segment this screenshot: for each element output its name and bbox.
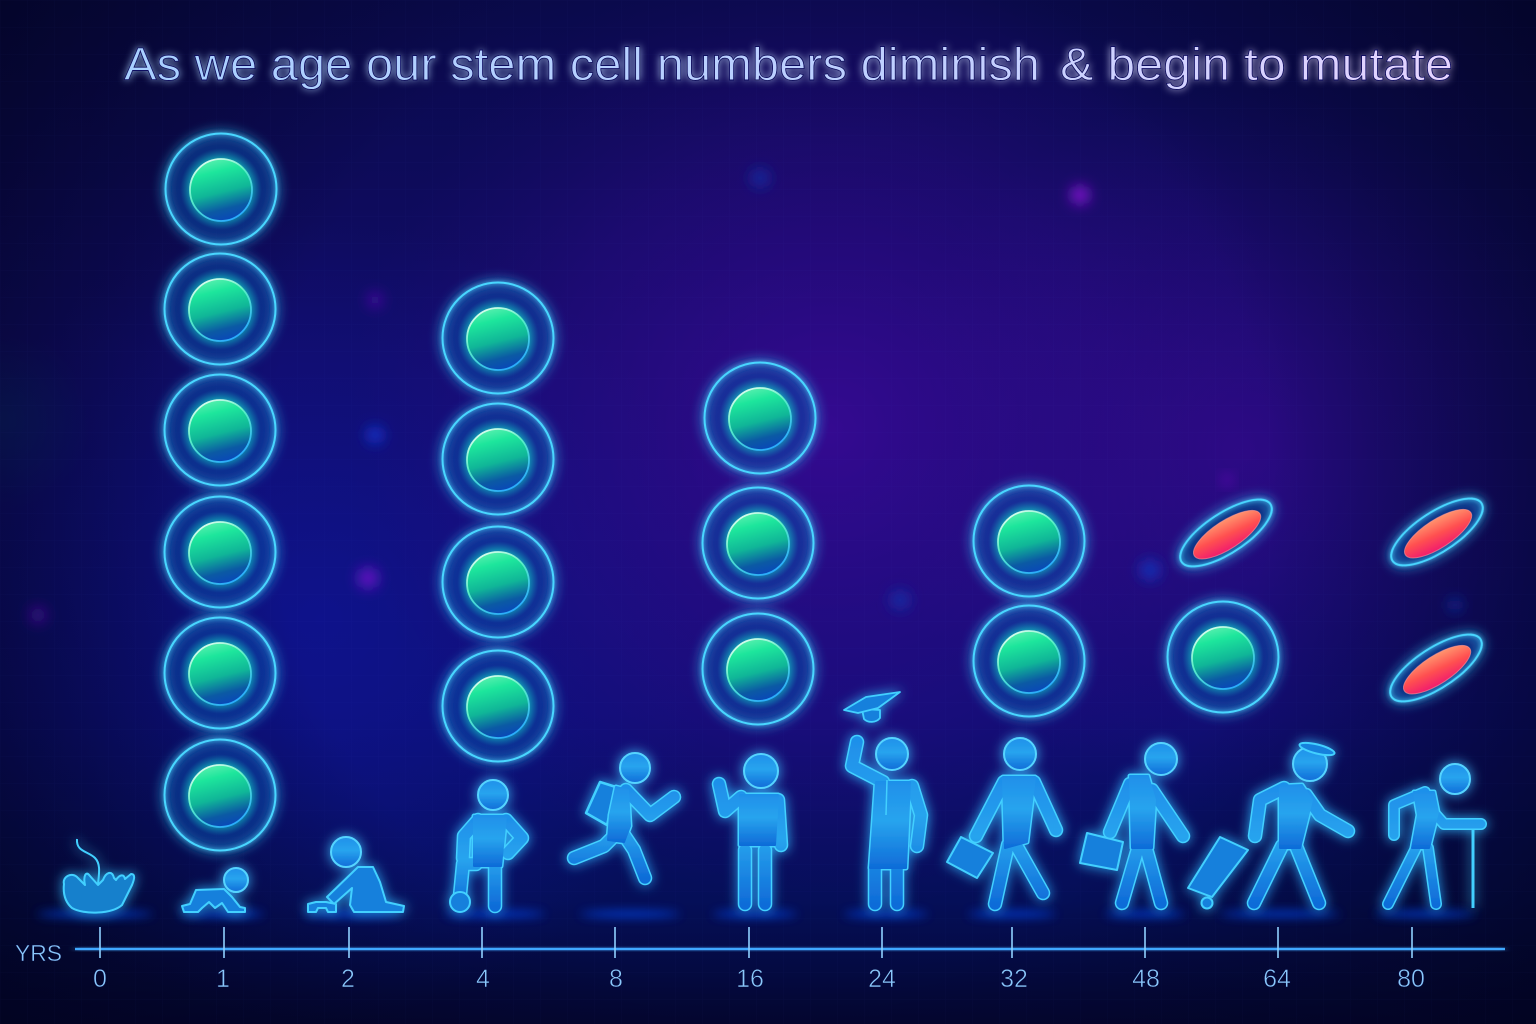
pilot cap bbox=[1298, 740, 1336, 758]
stem cell bbox=[974, 486, 1084, 596]
stem cell bbox=[1168, 602, 1278, 712]
toy bbox=[308, 902, 336, 912]
stem cell column: age 64 bbox=[1168, 487, 1281, 712]
age axis bbox=[15, 927, 1505, 993]
suitcase wheel bbox=[1202, 898, 1212, 908]
stem cell column: age 32 bbox=[974, 486, 1084, 716]
stem cell bbox=[164, 496, 276, 608]
title: & begin to mutate bbox=[1060, 38, 1453, 90]
figure: running child with backpack, age 8 bbox=[574, 753, 674, 878]
age labels: 24 bbox=[868, 965, 896, 993]
mutated cell bbox=[1382, 486, 1492, 578]
figure: crawling baby, age 1 bbox=[182, 868, 248, 912]
figure: child with ball, age 4 bbox=[450, 780, 522, 912]
age labels bbox=[93, 965, 1425, 993]
stem cell bbox=[164, 254, 276, 364]
stem cell bbox=[702, 488, 814, 598]
age labels: 80 bbox=[1397, 965, 1425, 993]
briefcase bbox=[1080, 833, 1123, 870]
stem cell bbox=[164, 740, 276, 850]
cane bbox=[1472, 826, 1474, 908]
age labels: 32 bbox=[1000, 965, 1028, 993]
figure: older adult with suitcase, age 64 bbox=[1188, 740, 1348, 908]
stem cell column: age 1 bbox=[164, 134, 276, 850]
age labels: 4 bbox=[476, 965, 490, 993]
stem cell bbox=[164, 618, 276, 728]
ground glows bbox=[37, 911, 1475, 917]
axis ticks bbox=[100, 927, 1412, 958]
stem cell bbox=[704, 362, 816, 474]
age labels: 1 bbox=[216, 965, 230, 993]
figure: waving teen, age 16 bbox=[719, 754, 781, 904]
age labels: 16 bbox=[736, 965, 764, 993]
stem cell column: age 16 bbox=[702, 362, 816, 724]
stem cell bbox=[166, 134, 276, 244]
stem cell bbox=[974, 606, 1084, 716]
figure: elderly person with cane, age 80 bbox=[1388, 764, 1481, 908]
backpack bbox=[586, 782, 616, 825]
title bbox=[124, 38, 1453, 90]
briefcase bbox=[947, 837, 993, 878]
age labels: 48 bbox=[1132, 965, 1160, 993]
stem cell bbox=[442, 282, 554, 394]
graduation cap bbox=[844, 692, 900, 722]
axis line bbox=[75, 948, 1505, 950]
stem cell bbox=[702, 614, 814, 724]
figure: graduate, age 24 bbox=[844, 692, 921, 904]
stem cell column: age 80 bbox=[1381, 486, 1492, 714]
age labels: 64 bbox=[1263, 965, 1291, 993]
stem cell bbox=[442, 650, 554, 762]
figure: toddler with toy, age 2 bbox=[308, 837, 404, 912]
stem cell column: age 4 bbox=[442, 282, 554, 762]
mutated cell bbox=[1171, 487, 1281, 579]
axis unit label: YRS bbox=[15, 940, 62, 966]
age labels: 8 bbox=[609, 965, 623, 993]
ball bbox=[450, 892, 470, 912]
figure: middle-aged adult with briefcase, age 48 bbox=[1080, 743, 1183, 903]
title: As we age our stem cell numbers diminish bbox=[124, 38, 1040, 90]
stem cell bbox=[442, 404, 554, 514]
figure: embryo, age 0 bbox=[64, 839, 134, 913]
age labels: 0 bbox=[93, 965, 107, 993]
mutated cell bbox=[1381, 622, 1491, 714]
stem cell bbox=[164, 374, 276, 486]
figure: adult with briefcase, age 32 bbox=[947, 738, 1056, 904]
suitcase bbox=[1188, 837, 1248, 897]
age labels: 2 bbox=[341, 965, 355, 993]
stem cell bbox=[442, 526, 554, 638]
